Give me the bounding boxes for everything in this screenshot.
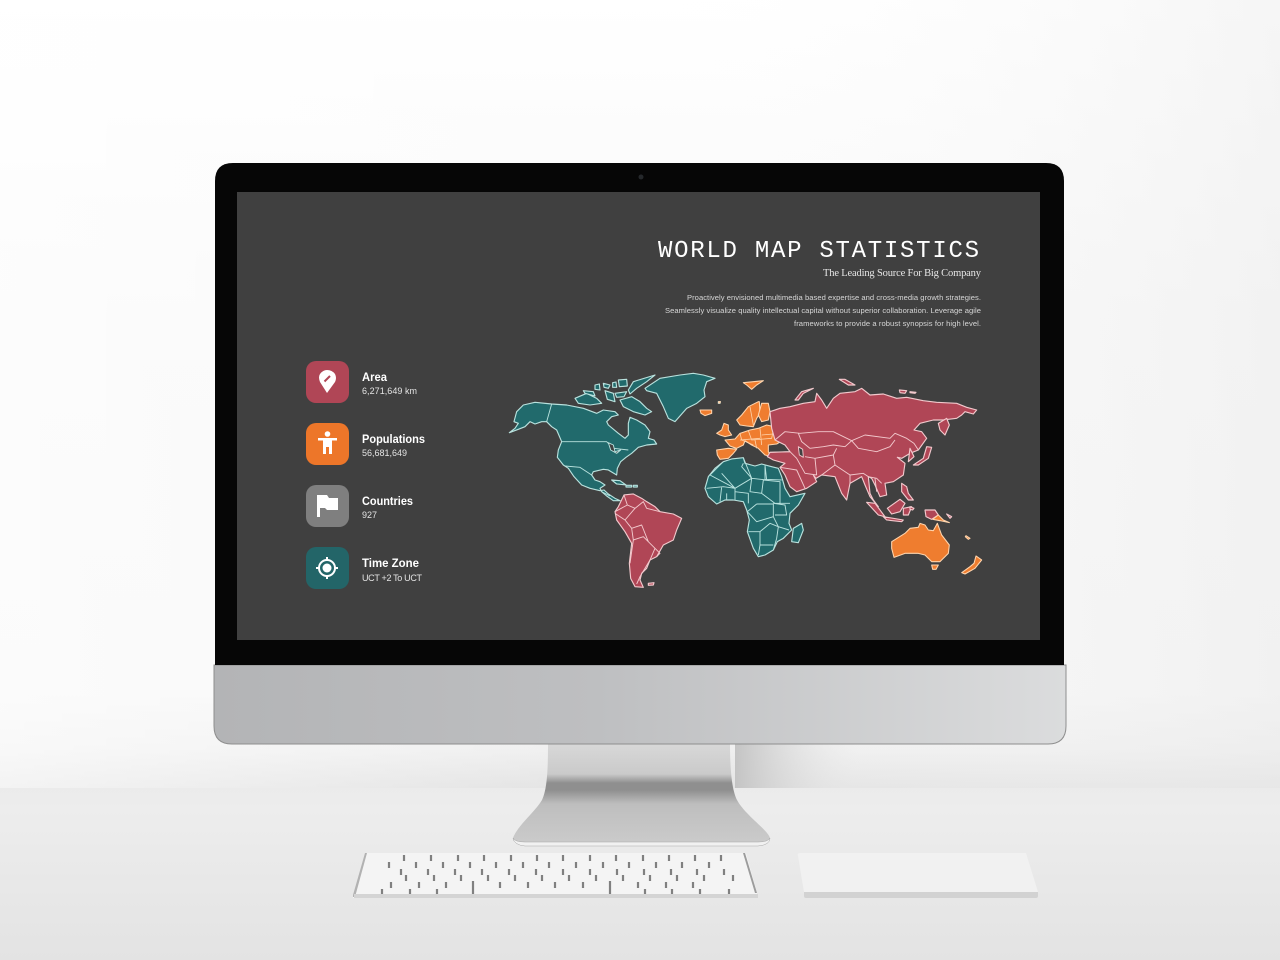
stat: time zone: [306, 547, 422, 589]
great lakes: [608, 443, 621, 453]
title: WORLD MAP STATISTICS: [658, 238, 979, 265]
greenland: [645, 373, 715, 422]
stat: area: 6,271,649 km: [362, 386, 417, 396]
monitor body: [214, 163, 1066, 744]
monitor stand: [513, 744, 770, 846]
icon: map pin: [306, 361, 349, 403]
caspian sea: [798, 447, 803, 457]
stat: time zone: UCT +2 To UCT: [362, 573, 422, 583]
trackpad: [798, 853, 1038, 898]
description text: frameworks to provide a robust synopsis for high level.: [794, 319, 981, 328]
stat: countries: Countries: [362, 496, 413, 508]
africa: [705, 458, 805, 557]
stat: populations: [306, 423, 425, 465]
stat: countries: [306, 485, 413, 527]
icon: target: [306, 547, 349, 589]
icon: flag: [306, 485, 349, 527]
webcam: [638, 174, 644, 180]
world map: [509, 373, 982, 587]
keyboard: [353, 853, 758, 898]
stat: area: Area: [362, 372, 388, 384]
stat: populations: Populations: [362, 434, 425, 446]
description text: [665, 293, 981, 328]
stat: populations: 56,681,649: [362, 448, 407, 458]
subtitle: The Leading Source For Big Company: [823, 268, 982, 279]
stat: countries: 927: [362, 510, 377, 520]
screen: [237, 192, 1040, 640]
north america: [509, 373, 720, 501]
description text: Proactively envisioned multimedia based expertise and cross-media growth strategies.: [687, 293, 981, 302]
stat: time zone: Time Zone: [362, 558, 419, 570]
australia and oceania: [892, 515, 982, 574]
icon: person: [306, 423, 349, 465]
stat: area: [306, 361, 417, 403]
europe: [700, 381, 783, 459]
asia: [767, 379, 977, 522]
description text: Seamlessly visualize quality intellectual capital without superior collaboration. Leverage agile: [665, 306, 981, 315]
keyboard key gaps: [382, 855, 733, 894]
south america: [615, 494, 682, 587]
